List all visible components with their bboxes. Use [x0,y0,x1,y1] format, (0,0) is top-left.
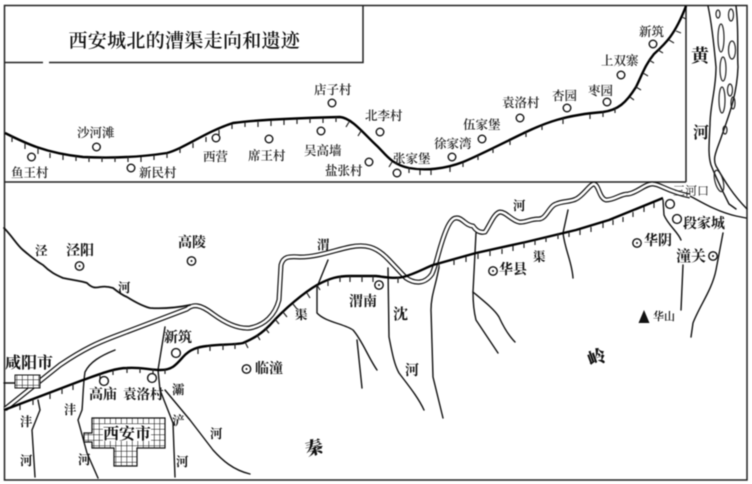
upper canal with ticks [5,6,686,175]
river and mountain labels: 沣 [20,414,33,429]
tributaries [4,200,723,478]
icon: Mount Hua [638,310,650,323]
place labels: 高庙 [89,386,117,403]
place labels: 袁洛村 [123,386,164,402]
place labels: 华县 [499,261,528,278]
river and mountain labels: 河 [78,453,91,467]
river and mountain labels: 沣 [64,402,77,417]
title box [5,6,363,62]
upper villages: 枣园 [588,84,613,98]
river and mountain labels: 河 [210,427,223,441]
upper villages: 沙河滩 [77,125,115,140]
river and mountain labels: 泾 [35,244,48,258]
Xi'an city: 西安市 [103,425,151,443]
Yellow River: 黄 [691,46,711,66]
upper villages: 席王村 [248,148,286,163]
river and mountain labels: 河 [118,281,131,295]
river and mountain labels: 渭 [317,237,330,252]
river and mountain labels: 河 [513,199,526,213]
place labels: 华山 [653,309,675,323]
river and mountain labels: 河 [176,455,189,469]
Yellow River: 河 [693,124,709,142]
river and mountain labels: 河 [405,363,419,379]
upper villages: 徐家湾 [434,136,472,151]
river and mountain labels: 沈 [393,305,408,323]
Yellow River [690,6,747,218]
river and mountain labels: 灞 [172,382,185,397]
county seats [75,200,717,385]
place labels: 高陵 [178,234,206,251]
river and mountain labels: 岭 [585,344,609,370]
place labels: 潼关 [676,248,706,265]
upper villages: 上双寨 [601,53,639,68]
river and mountain labels: 渠 [533,249,546,264]
river and mountain labels: 渠 [295,307,308,322]
upper villages: 店子村 [314,82,352,97]
place labels: 临潼 [255,360,283,377]
upper villages: 盐张村 [325,163,363,178]
river and mountain labels [20,199,609,469]
upper villages: 北李村 [365,108,403,123]
Wei River [5,184,690,409]
place labels [66,184,725,403]
upper villages [11,24,665,180]
river and mountain labels: 浐 [172,413,185,428]
upper villages: 张家堡 [393,151,431,166]
river and mountain labels: 河 [20,454,33,468]
upper villages: 西营 [203,149,229,164]
Xianyang city: 咸阳市 [5,354,53,372]
river and mountain labels: 秦 [303,435,326,460]
place labels: 泾阳 [66,243,94,259]
Xianyang city [4,354,53,388]
upper villages: 鱼王村 [11,165,49,180]
lower canal with ticks [4,198,663,410]
upper villages: 伍家堡 [463,117,501,132]
place labels: 段家城 [683,215,725,232]
place labels: 三河口 [673,184,709,198]
upper villages: 新筑 [639,24,665,39]
upper villages: 新民村 [139,165,177,180]
place labels: 华阴 [644,232,672,249]
Xi'an city [84,418,165,466]
upper villages: 吴高墙 [304,143,342,158]
place labels: 渭南 [349,293,377,310]
place labels: 新筑 [164,329,192,346]
title: 西安城北的漕渠走向和遗迹 [68,29,301,52]
upper villages: 杏园 [552,88,577,103]
upper villages: 袁洛村 [502,95,540,110]
